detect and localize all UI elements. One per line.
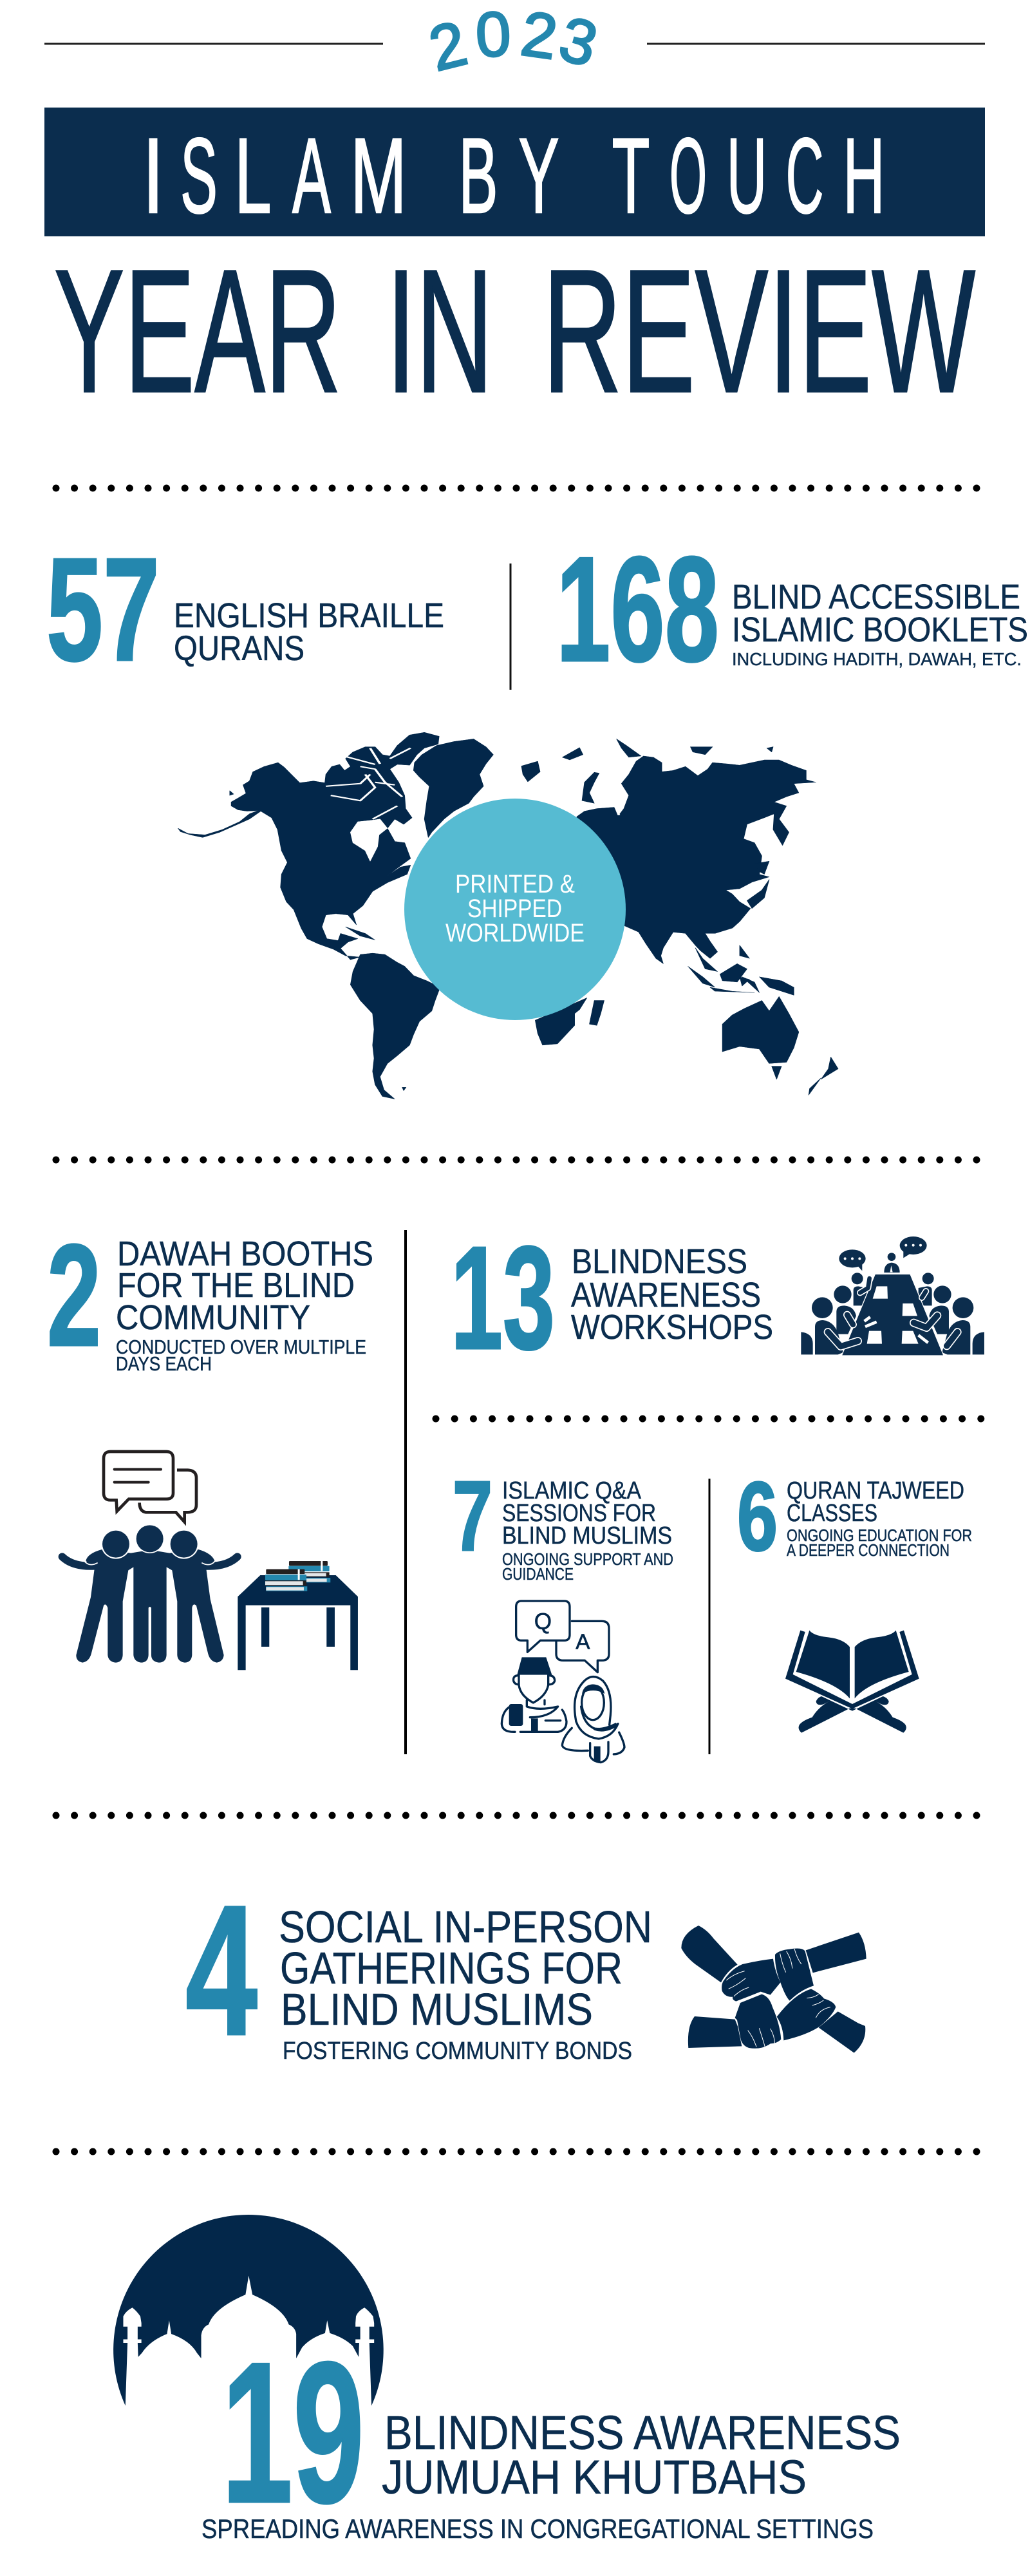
year heading: 2023: 3 <box>552 3 604 80</box>
stat: 6 Quran tajweed classes: 6 <box>737 1462 778 1571</box>
year heading: 2023 <box>422 0 604 84</box>
icon: Q and A speech bubbles with man and woman <box>501 1601 624 1763</box>
stat: 4 social in-person gatherings <box>185 1867 652 2074</box>
stat: 6 Quran tajweed classes: ONGOING EDUCATION FOR <box>787 1526 972 1545</box>
stat: 7 Islamic Q&A sessions: SESSIONS FOR <box>502 1500 656 1527</box>
stat: 2 dawah booths: 2 <box>47 1214 101 1376</box>
stat: 2 dawah booths: CONDUCTED OVER MULTIPLE <box>116 1336 366 1358</box>
stat: 13 blindness awareness workshops <box>451 1217 773 1380</box>
year heading: 2023: 0 <box>474 0 512 70</box>
stat: 4 social in-person gatherings: SOCIAL IN-PERSON <box>279 1902 652 1952</box>
title banner: Islam by Touch: I <box>142 116 164 236</box>
stat: 13 blindness awareness workshops: 13 <box>451 1217 555 1380</box>
stat: 168 blind accessible Islamic booklets <box>556 526 1028 693</box>
stat: 19 Jumuah khutbahs: JUMUAH KHUTBAHS <box>382 2450 807 2504</box>
stat: 19 Jumuah khutbahs: BLINDNESS AWARENESS <box>384 2406 901 2459</box>
stat: 7 Islamic Q&A sessions: GUIDANCE <box>502 1564 574 1584</box>
stat: 4 social in-person gatherings: FOSTERING COMMUNITY BONDS <box>283 2038 632 2065</box>
stat: 7 Islamic Q&A sessions: ONGOING SUPPORT AND <box>502 1549 673 1569</box>
stat: 2 dawah booths: DAYS EACH <box>116 1352 212 1375</box>
title banner: Islam by Touch: H <box>843 117 885 236</box>
year heading: 2023: 2 <box>422 7 474 84</box>
title banner: Islam by Touch: M <box>350 116 407 236</box>
stat: 13 blindness awareness workshops: BLINDNESS <box>572 1242 747 1281</box>
stat: 2 dawah booths: DAWAH BOOTHS <box>117 1235 373 1273</box>
title: Year in Review <box>54 233 977 429</box>
stat: 19 Jumuah khutbahs: 19 <box>221 2321 364 2545</box>
callout: printed and shipped worldwide: WORLDWIDE <box>445 919 585 947</box>
callout: printed and shipped worldwide: SHIPPED <box>467 895 562 923</box>
stat: 7 Islamic Q&A sessions: ISLAMIC Q&A <box>502 1477 642 1504</box>
title: Year in Review: YEAR <box>54 233 341 429</box>
icon: workshop meeting around a table <box>801 1236 984 1356</box>
stat: 13 blindness awareness workshops: AWARENESS <box>571 1276 761 1314</box>
stat: 7 Islamic Q&A sessions: 7 <box>453 1461 492 1571</box>
stat: 57 English Braille Qurans: 57 <box>46 528 160 692</box>
stat: 19 Jumuah khutbahs: SPREADING AWARENESS IN CONGREGATIONAL SETTINGS <box>201 2514 874 2544</box>
stat: 168 blind accessible Islamic booklets: INCLUDING HADITH, DAWAH, ETC. <box>732 649 1022 669</box>
icon: people by a book table with speech bubbles <box>62 1452 358 1670</box>
stat: 168 blind accessible Islamic booklets: 168 <box>556 526 719 693</box>
title banner: Islam by Touch: B <box>459 117 498 236</box>
stat: 6 Quran tajweed classes <box>737 1462 972 1571</box>
map: continents <box>178 732 838 1099</box>
stat: 57 English Braille Qurans: ENGLISH BRAILLE <box>174 596 444 635</box>
stat: 7 Islamic Q&A sessions <box>453 1461 673 1584</box>
title banner: Islam by Touch: Y <box>518 116 559 236</box>
title banner: Islam by Touch: O <box>670 116 707 236</box>
stat: 57 English Braille Qurans: QURANS <box>174 629 304 668</box>
stat: 19 Jumuah khutbahs <box>201 2321 901 2545</box>
title banner: Islam by Touch: L <box>234 117 272 236</box>
icon: Q and A speech bubbles with man and woman: A <box>576 1631 590 1654</box>
icon: Q and A speech bubbles with man and woman: Q <box>534 1609 552 1634</box>
callout: printed and shipped worldwide <box>404 799 626 1020</box>
callout: printed and shipped worldwide: PRINTED & <box>455 870 575 898</box>
stat: 2 dawah booths: COMMUNITY <box>116 1298 310 1337</box>
icon: mosque silhouette in a dark circle <box>113 2215 384 2406</box>
icon: four interlocked hands <box>681 1926 866 2053</box>
world map with worldwide shipping callout <box>178 732 838 1099</box>
stat: 6 Quran tajweed classes: CLASSES <box>787 1500 877 1527</box>
title banner: Islam by Touch <box>44 108 985 236</box>
title banner: Islam by Touch: C <box>786 116 823 236</box>
title banner: Islam by Touch: U <box>727 117 767 236</box>
title: Year in Review: IN <box>386 233 493 429</box>
stat: 6 Quran tajweed classes: QURAN TAJWEED <box>787 1477 964 1504</box>
title banner: Islam by Touch: T <box>612 116 650 235</box>
stat: 4 social in-person gatherings: 4 <box>185 1867 258 2074</box>
stat: 6 Quran tajweed classes: A DEEPER CONNECTION <box>787 1540 950 1560</box>
stat: 2 dawah booths <box>47 1214 373 1376</box>
stat: 4 social in-person gatherings: BLIND MUSLIMS <box>281 1984 593 2034</box>
stat: 2 dawah booths: FOR THE BLIND <box>117 1266 355 1305</box>
stat: 4 social in-person gatherings: GATHERINGS FOR <box>280 1943 623 1993</box>
title banner: Islam by Touch: A <box>292 117 331 236</box>
title banner: Islam by Touch: S <box>180 117 218 236</box>
stat: 13 blindness awareness workshops: WORKSHOPS <box>571 1308 773 1347</box>
stat: 7 Islamic Q&A sessions: BLIND MUSLIMS <box>502 1522 672 1549</box>
stat: 57 English Braille Qurans <box>46 528 444 692</box>
icon: open Quran on a stand <box>785 1631 919 1733</box>
